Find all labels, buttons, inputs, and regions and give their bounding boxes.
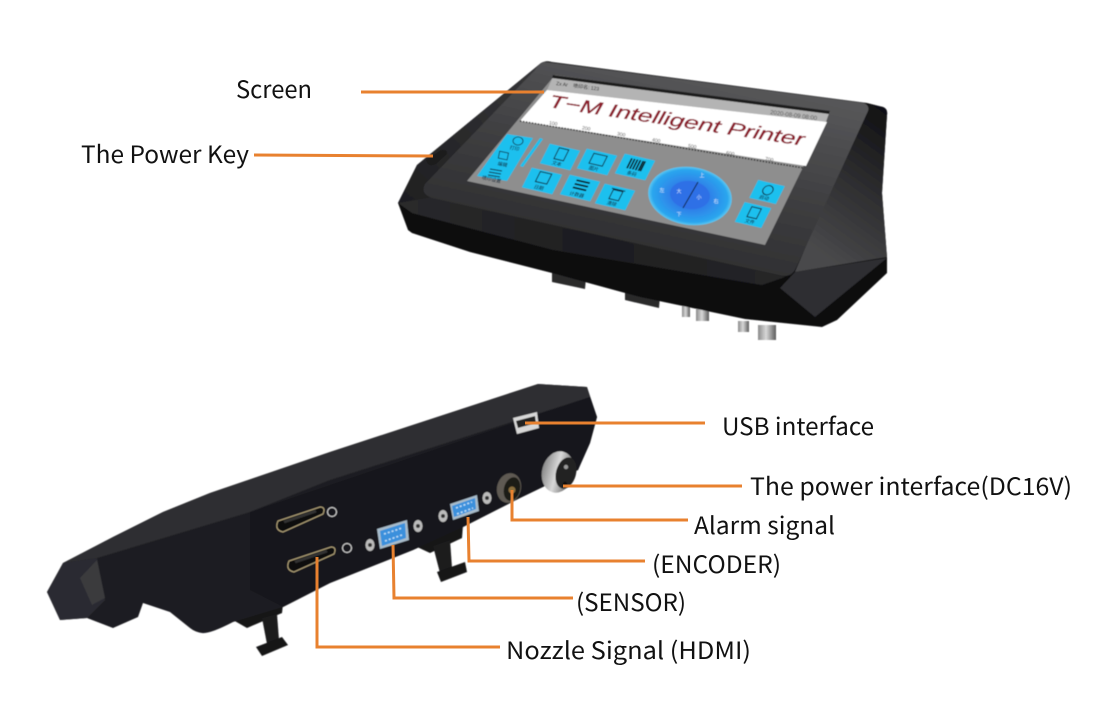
button: delete: 清除	[605, 199, 618, 208]
direction pad: 小	[696, 194, 702, 201]
panel shade	[250, 397, 597, 607]
button: barcode	[615, 154, 655, 180]
top device: printer controller front view	[398, 61, 887, 340]
direction pad: 左	[659, 187, 665, 194]
left menu column	[477, 134, 543, 185]
button: text: 文本	[550, 159, 563, 168]
face bezel	[424, 62, 868, 276]
ruler: 400	[652, 137, 661, 145]
button: file	[735, 202, 771, 228]
mounting knobs	[233, 525, 467, 656]
leader line: power key	[254, 155, 433, 156]
lower right facet	[780, 258, 887, 317]
button: counter	[560, 175, 600, 201]
touch screen	[467, 75, 830, 245]
left end facet	[47, 558, 105, 620]
label: power interface: The power interface(DC16V)	[750, 467, 1072, 502]
power connector	[537, 448, 580, 496]
ruler: 600	[726, 150, 735, 158]
button: start: 启动	[758, 194, 770, 202]
leader line: screen	[361, 90, 544, 94]
white print preview band	[520, 90, 827, 166]
rear ports and feet under top device	[552, 270, 776, 340]
label: screen: Screen	[236, 70, 312, 105]
button: date: 日期	[532, 184, 545, 192]
left menu column: 喷印设置	[481, 174, 502, 185]
body silhouette	[47, 384, 597, 633]
DB9 encoder port	[438, 492, 492, 522]
ruler: 100	[549, 120, 558, 128]
left bevel	[398, 63, 552, 203]
ruler: 700	[765, 156, 774, 164]
leader line: USB	[525, 422, 705, 424]
label: alarm: Alarm signal	[694, 506, 835, 541]
label: encoder: (ENCODER)	[652, 545, 781, 580]
direction pad: 大	[676, 188, 682, 195]
label: nozzle signal: Nozzle Signal (HDMI)	[506, 631, 751, 666]
ruler: 500	[688, 143, 697, 151]
button: delete	[595, 184, 635, 210]
label: power key: The Power Key	[81, 135, 249, 170]
HDMI port 2	[277, 507, 336, 532]
label: USB: USB interface	[722, 407, 874, 442]
status bar: Zx Ar 喷印名: 123	[556, 80, 600, 93]
leader line: nozzle signal	[317, 557, 500, 647]
DB9 sensor port	[366, 520, 422, 551]
left menu column: 编辑	[497, 160, 508, 169]
direction pad: 右	[713, 198, 719, 205]
status bar: 2020-08-09 08:00	[770, 110, 818, 122]
power key	[426, 150, 447, 165]
alarm signal connector	[494, 470, 524, 506]
ruler	[520, 120, 803, 168]
leader line: power interface	[563, 484, 742, 488]
button: picture: 图片	[587, 164, 600, 173]
button: start	[749, 180, 785, 204]
USB port	[513, 412, 539, 434]
leader line: alarm	[512, 490, 688, 520]
button: date	[522, 168, 562, 194]
button: file: 文件	[743, 217, 756, 226]
device silhouette	[398, 61, 887, 327]
button: picture	[577, 149, 617, 175]
HDMI port 1	[288, 544, 352, 572]
button: text	[540, 144, 580, 170]
ruler: 300	[617, 131, 626, 139]
status bar	[547, 75, 830, 122]
screen grey background	[467, 75, 830, 245]
direction pad	[644, 161, 736, 231]
ruler: 200	[582, 125, 591, 133]
upper bevel	[63, 384, 590, 563]
right wing	[795, 104, 887, 272]
leader line: encoder	[468, 517, 645, 561]
direction pad: 下	[676, 212, 682, 218]
direction pad: 上	[699, 172, 705, 179]
front lower strip	[398, 197, 785, 285]
button: counter: 计数器	[568, 190, 585, 200]
label: sensor: (SENSOR)	[576, 583, 686, 618]
bottom device: connector panel view	[47, 384, 597, 656]
button: barcode: 条码	[625, 169, 638, 178]
left menu column: 打印	[509, 144, 520, 153]
leader line: sensor	[393, 545, 573, 598]
printed message: T−M Intelligent Printer	[547, 92, 808, 150]
